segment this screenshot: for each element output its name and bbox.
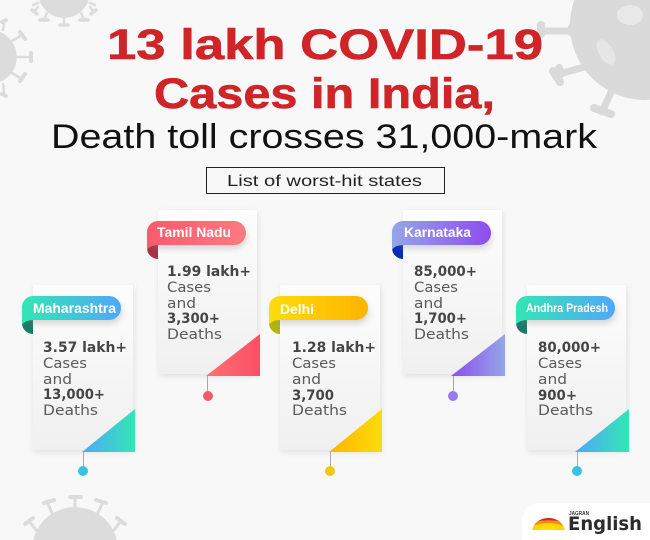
ribbon: Andhra Pradesh: Andhra Pradesh — [526, 301, 608, 315]
fold: Andhra Pradesh — [575, 409, 629, 452]
ribbon: Maharashtra — [22, 296, 121, 325]
list label box: List of worst-hit states — [227, 173, 422, 190]
stats: Andhra Pradesh: and — [538, 372, 567, 388]
stats: Maharashtra — [43, 340, 127, 419]
stats: Tamil Nadu: Deaths — [167, 327, 222, 343]
ribbon: Tamil Nadu: Tamil Nadu — [157, 224, 231, 240]
stats: Delhi: 1.28 lakh+ — [292, 340, 376, 356]
stats: Tamil Nadu: and — [167, 296, 196, 312]
stats: Karnataka: 85,000+ — [414, 264, 477, 280]
stats: Tamil Nadu: Cases — [167, 280, 211, 296]
ribbon: Delhi — [269, 296, 368, 325]
ribbon: Andhra Pradesh — [516, 296, 615, 325]
stats: Andhra Pradesh: Deaths — [538, 403, 593, 419]
list label box — [206, 168, 444, 194]
stats: Delhi: 3,700 — [292, 388, 334, 404]
icon: virus bottom — [25, 497, 125, 540]
fold: Delhi — [329, 409, 382, 452]
ribbon: Tamil Nadu — [147, 221, 246, 250]
stats: Tamil Nadu: 1.99 lakh+ — [167, 264, 251, 280]
ribbon: Karnataka — [392, 221, 491, 250]
logo: Jagran English — [522, 503, 650, 540]
pin: Delhi — [325, 452, 335, 476]
stats: Andhra Pradesh: Cases — [538, 356, 582, 372]
stats: Andhra Pradesh: 80,000+ — [538, 340, 601, 356]
panel: Tamil Nadu — [147, 210, 260, 401]
stats: Karnataka: and — [414, 296, 443, 312]
panel: Delhi — [269, 285, 382, 476]
fold: Tamil Nadu — [206, 334, 260, 376]
stats: Maharashtra: 3.57 lakh+ — [43, 340, 127, 356]
icon: virus left — [0, 20, 31, 96]
panel: Karnataka — [392, 210, 505, 401]
stats: Maharashtra: 13,000+ — [43, 387, 105, 403]
stats: Karnataka: Cases — [414, 280, 458, 296]
logo: Jagran English: JAGRAN — [569, 511, 589, 517]
stats: Delhi — [292, 340, 376, 419]
subtitle: Death toll crosses 31,000-mark — [51, 118, 598, 156]
stats: Andhra Pradesh — [538, 340, 601, 419]
title — [107, 21, 543, 118]
stats: Maharashtra: Deaths — [43, 403, 98, 419]
stats: Maharashtra: and — [43, 372, 72, 388]
stats: Delhi: Deaths — [292, 403, 347, 419]
pin: Andhra Pradesh — [572, 452, 582, 476]
pin: Karnataka — [448, 376, 458, 401]
ribbon: Maharashtra: Maharashtra — [33, 300, 116, 316]
icon: virus top right — [541, 0, 650, 114]
ribbon: Karnataka: Karnataka — [404, 224, 471, 240]
stats: Delhi: Cases — [292, 356, 336, 372]
pin: Maharashtra — [78, 452, 88, 476]
stats: Karnataka — [414, 264, 477, 343]
logo: Jagran English: English — [568, 513, 642, 535]
stats: Andhra Pradesh: 900+ — [538, 388, 577, 404]
stats: Tamil Nadu: 3,300+ — [167, 311, 220, 327]
title: Cases in India, — [154, 70, 495, 118]
stats: Tamil Nadu — [167, 264, 251, 343]
icon: virus top left — [32, 0, 96, 25]
fold: Maharashtra — [82, 409, 135, 452]
stats: Maharashtra: Cases — [43, 356, 87, 372]
panel: Andhra Pradesh — [516, 285, 629, 476]
ribbon: Delhi: Delhi — [280, 301, 314, 317]
stats: Karnataka: 1,700+ — [414, 311, 467, 327]
panel: Maharashtra — [22, 285, 135, 476]
stats: Karnataka: Deaths — [414, 327, 469, 343]
title: 13 lakh COVID-19 — [107, 21, 543, 69]
pin: Tamil Nadu — [203, 376, 213, 401]
fold: Karnataka — [451, 334, 505, 376]
stats: Delhi: and — [292, 372, 321, 388]
